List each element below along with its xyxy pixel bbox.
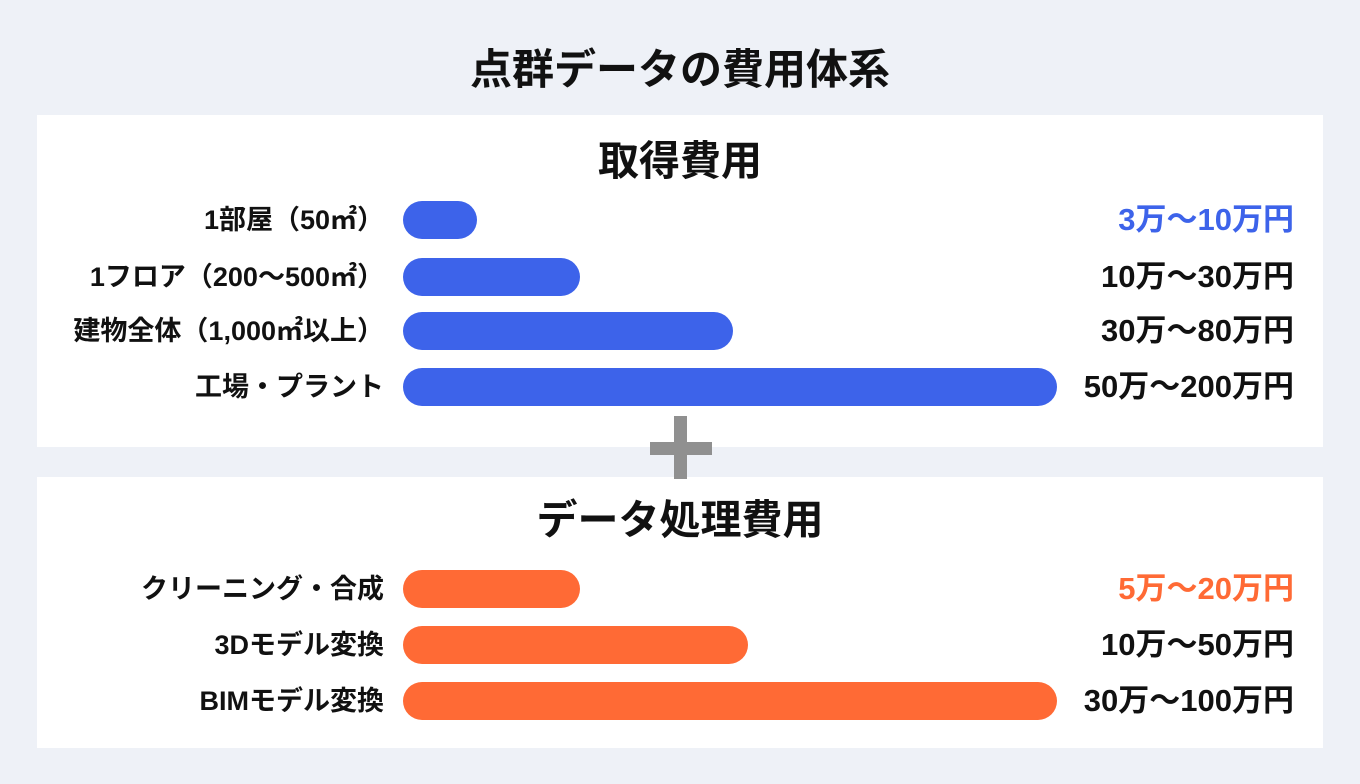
row 2: 10万〜30万円 bbox=[1101, 259, 1294, 294]
row 3: 30万〜80万円 bbox=[1101, 313, 1294, 348]
row 2 bbox=[90, 258, 1294, 296]
row 1: 3万〜10万円 bbox=[1118, 202, 1294, 237]
row 3 bbox=[73, 312, 1294, 350]
row 4: 50万〜200万円 bbox=[1084, 369, 1294, 404]
title: 点群データの費用体系 bbox=[470, 46, 890, 93]
panel: acquisition costs bbox=[37, 115, 1323, 447]
row 3 bbox=[200, 682, 1294, 720]
heading: acquisition: 取得費用 bbox=[598, 138, 762, 184]
heading: processing: データ処理費用 bbox=[536, 497, 824, 543]
row 4: 工場・プラント bbox=[195, 372, 384, 402]
row 3: BIMモデル変換 bbox=[200, 686, 384, 716]
row 1: 1部屋（50㎡） bbox=[204, 205, 384, 235]
row 2: 3Dモデル変換 bbox=[214, 630, 384, 660]
row 2: 1フロア（200〜500㎡） bbox=[90, 262, 384, 292]
row 1 bbox=[204, 201, 1294, 239]
row 2: 10万〜50万円 bbox=[1101, 627, 1294, 662]
row 3: 30万〜100万円 bbox=[1084, 683, 1294, 718]
row 2 bbox=[214, 626, 1294, 664]
icon: plus bbox=[650, 416, 712, 479]
row 3: 建物全体（1,000㎡以上） bbox=[73, 316, 384, 346]
row 1: 5万〜20万円 bbox=[1118, 571, 1294, 606]
row 4 bbox=[195, 368, 1294, 406]
row 1 bbox=[141, 570, 1294, 608]
row 1: クリーニング・合成 bbox=[141, 574, 384, 604]
panel: processing costs bbox=[37, 477, 1323, 748]
